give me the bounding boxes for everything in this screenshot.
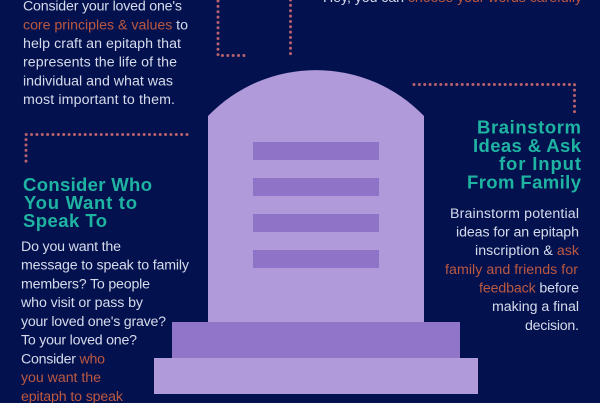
inscription bars — [253, 142, 379, 268]
tombstone plinth — [172, 322, 460, 358]
icon: tombstone — [154, 70, 478, 394]
text block: who to speak to: you want the — [21, 370, 101, 386]
heading: brainstorm ideas: Ideas & Ask — [473, 135, 582, 156]
dotted connector: top left — [218, 1, 247, 56]
text block: who to speak to: To your loved one? — [21, 333, 137, 349]
text block: core principles: represents the life of the — [23, 55, 177, 71]
tombstone base — [154, 358, 478, 394]
text block: brainstorm ideas: feedback before — [479, 280, 579, 296]
text block: brainstorm ideas: Brainstorm potential — [450, 206, 579, 222]
text block: brainstorm ideas: making a final — [492, 299, 579, 315]
heading: brainstorm ideas — [467, 116, 582, 192]
text block: brainstorm ideas: inscription & ask — [475, 243, 580, 259]
text block: core principles: core principles & values to — [23, 17, 188, 33]
text block: brainstorm ideas: ideas for an epitaph — [456, 224, 579, 240]
text block: who to speak to: who visit or pass by — [20, 295, 144, 311]
text block: who to speak to: members? To people — [21, 276, 150, 292]
dotted connector: right section — [414, 84, 574, 113]
heading: brainstorm ideas: From Family — [467, 172, 582, 192]
heading: brainstorm ideas: Brainstorm — [477, 116, 581, 138]
heading: consider who you want to speak to: Speak To — [23, 210, 107, 231]
heading: consider who you want to speak to: You Want to — [24, 192, 137, 213]
heading: consider who you want to speak to: Consider Who — [23, 174, 152, 195]
text block: who to speak to: Consider who — [21, 352, 105, 368]
text block: core principles: help craft an epitaph that — [23, 36, 181, 52]
text block: who to speak to: Do you want the — [21, 239, 121, 255]
dotted connector: left section — [26, 134, 187, 164]
text block: core principles: most important to them. — [23, 92, 175, 108]
dotted connector: top centre — [289, 0, 292, 54]
text block: brainstorm ideas: decision. — [525, 318, 579, 334]
text block: core principles — [23, 0, 188, 108]
tombstone body — [208, 70, 424, 322]
text block: brainstorm ideas: family and friends for — [445, 262, 578, 278]
heading: consider who you want to speak to — [23, 174, 152, 231]
heading: brainstorm ideas: for Input — [499, 153, 581, 174]
text block: who to speak to: your loved one's grave? — [21, 314, 166, 330]
text block: who to speak to: message to speak to family — [21, 258, 190, 274]
text block: who to speak to — [20, 239, 190, 403]
text block: brainstorm ideas — [445, 206, 580, 334]
text block: core principles: individual and what was — [23, 73, 173, 89]
